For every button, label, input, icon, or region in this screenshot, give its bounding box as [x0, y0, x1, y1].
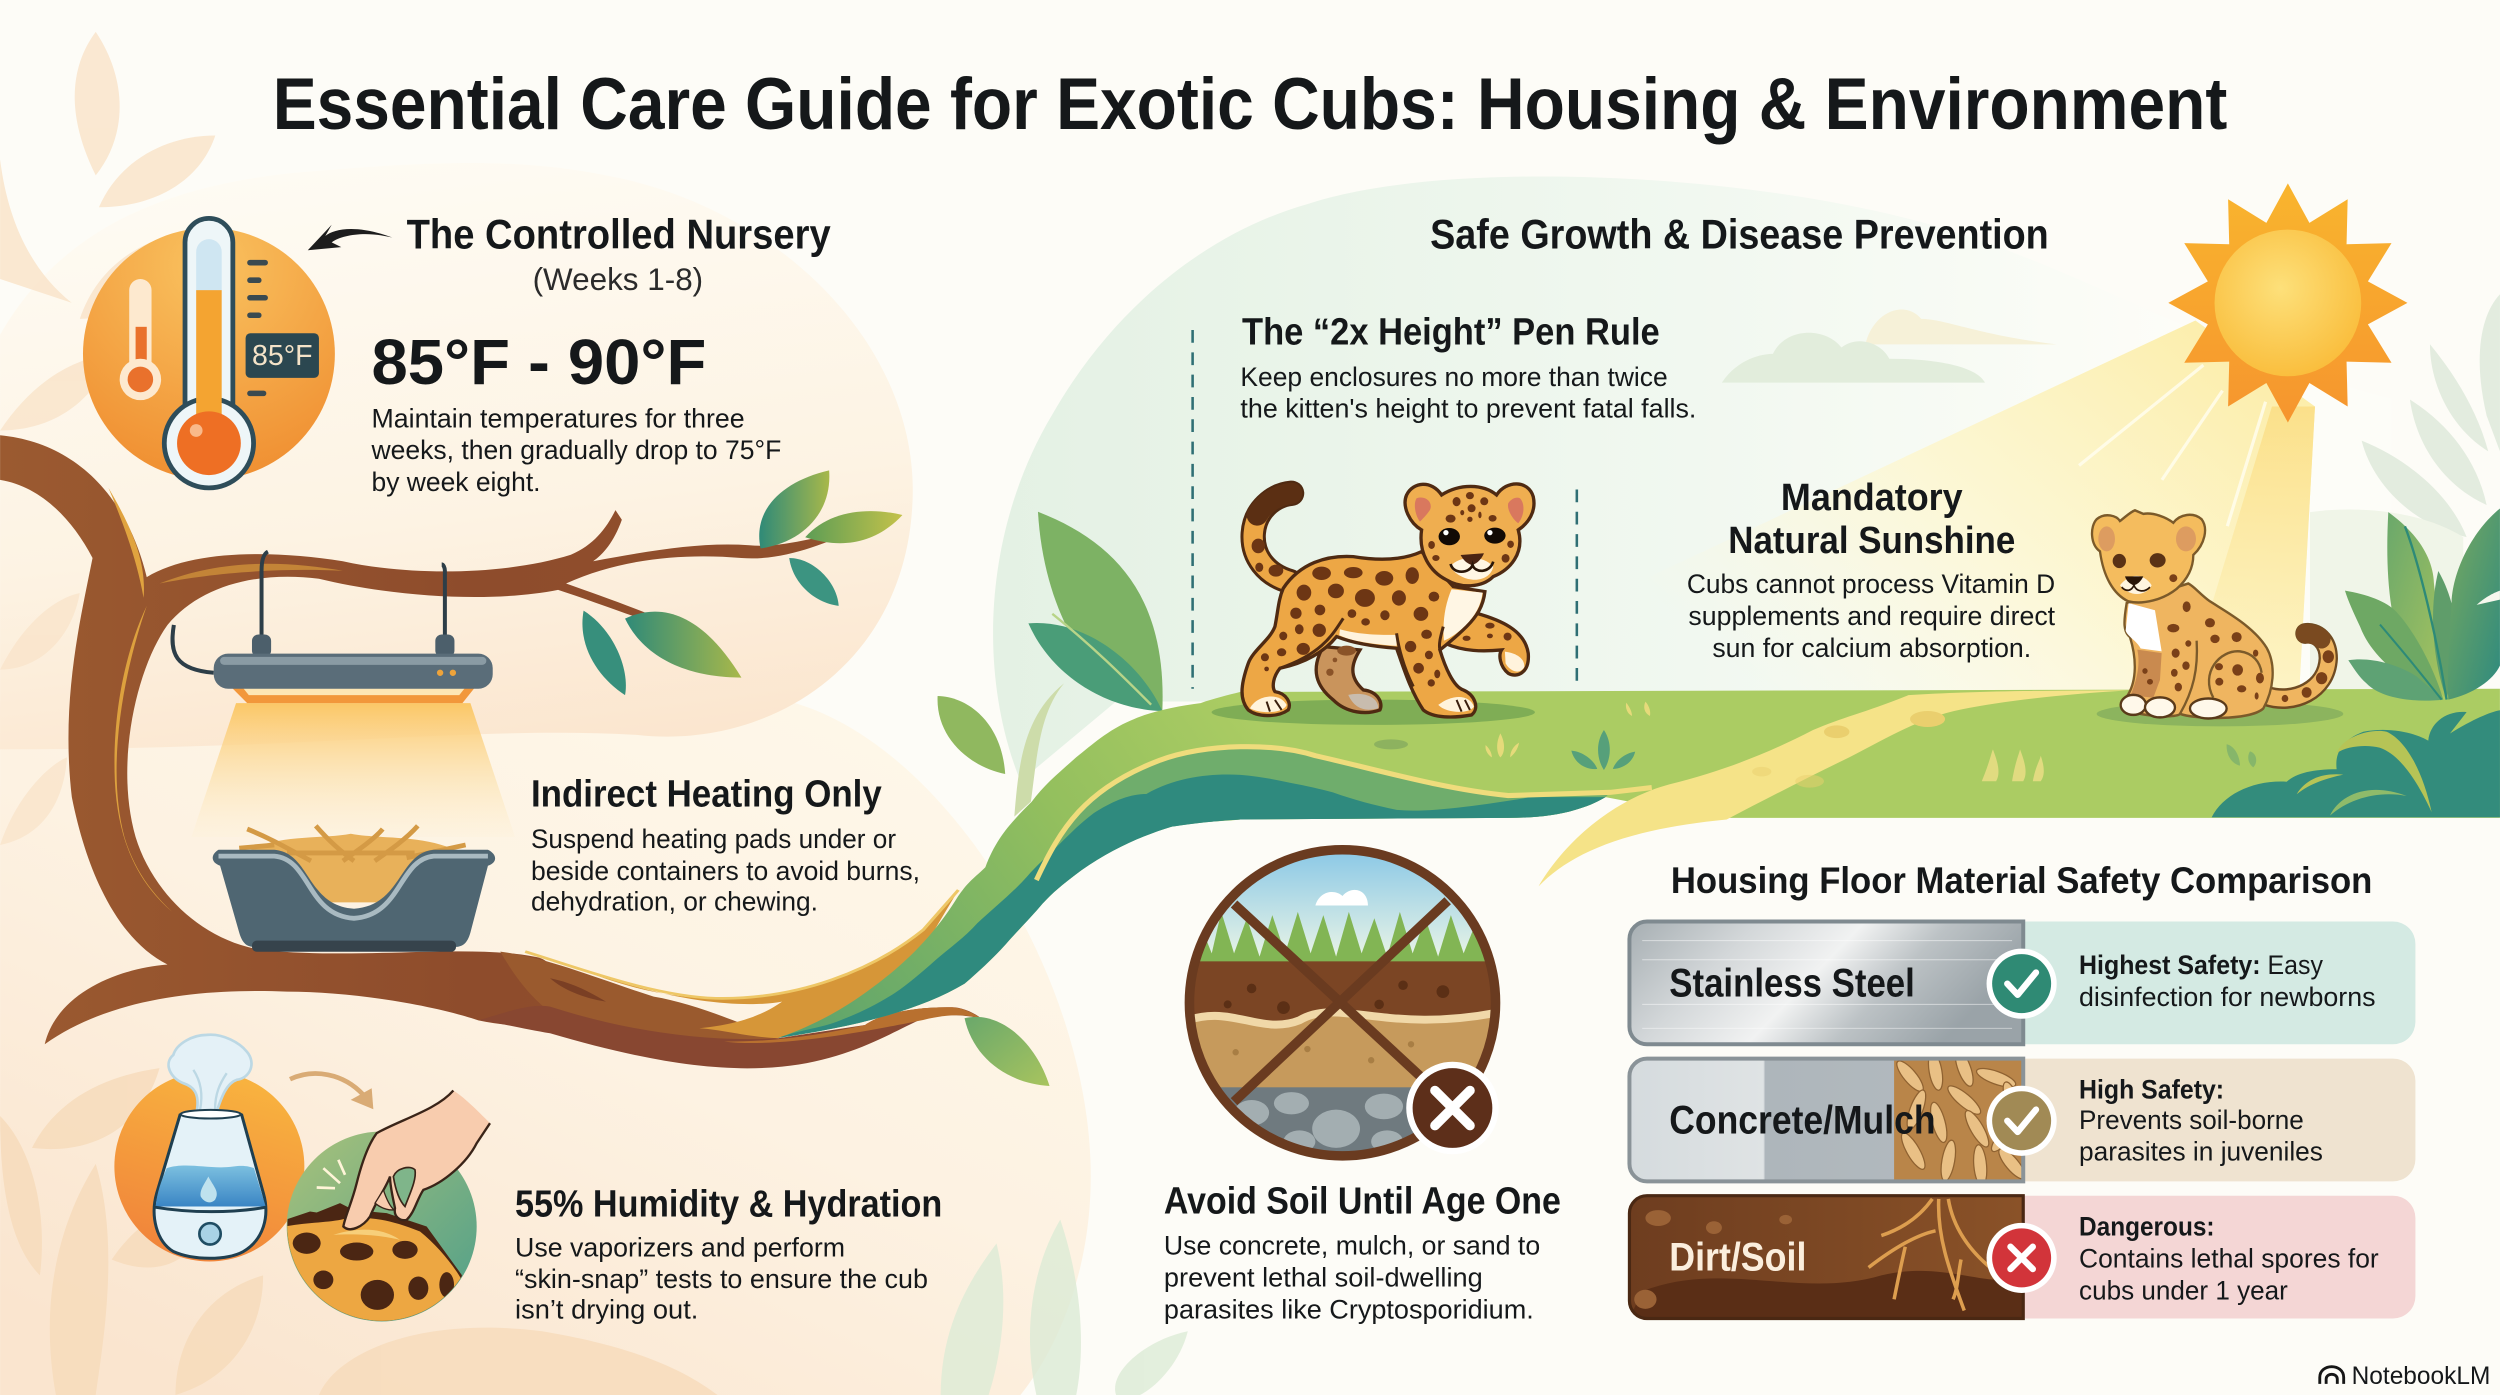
- heading: the controlled nursery: (Weeks 1-8): [533, 262, 703, 297]
- stat: temperature range: 85°F - 90°F: [372, 326, 706, 398]
- text: natural sunshine: Cubs cannot process Vitamin D: [1687, 568, 2055, 599]
- branch: lower limb and gold highlights: [480, 683, 1064, 1068]
- NotebookLM logo: NotebookLM: [2352, 1363, 2490, 1390]
- height markers: [1193, 330, 1577, 689]
- table row: stainless steel: [1629, 921, 2415, 1044]
- cub: walking cheetah: [1212, 484, 1535, 725]
- text: pen rule: the kitten's height to prevent fatal falls.: [1240, 393, 1696, 424]
- heading: safe growth: Safe Growth & Disease Prevention: [1430, 211, 2049, 258]
- text: indirect heating: [531, 773, 920, 916]
- text: avoid soil: Avoid Soil Until Age One: [1164, 1179, 1561, 1222]
- arrow to nursery heading: [308, 225, 392, 250]
- text: avoid soil: [1164, 1179, 1561, 1324]
- text: natural sunshine: supplements and require direct: [1688, 600, 2056, 631]
- text: natural sunshine: sun for calcium absorption.: [1712, 632, 2031, 663]
- table row: concrete and mulch: Prevents soil-borne: [2079, 1104, 2304, 1135]
- plants at lower right: [2212, 509, 2500, 817]
- icon: skin-snap test: [285, 1091, 490, 1327]
- plants flanking the hill: [1028, 512, 1163, 711]
- table row: dirt and soil: [1629, 1196, 2415, 1318]
- icon: heat lamp and nest basket: [172, 552, 515, 952]
- text: humidity and hydration: [515, 1182, 942, 1324]
- pale foliage at right: [2310, 294, 2500, 694]
- table row: dirt and soil: Dangerous:: [2079, 1211, 2215, 1242]
- cub: sitting cheetah: [2092, 510, 2343, 726]
- table row: concrete and mulch: Concrete/Mulch: [1669, 1099, 1936, 1143]
- text: natural sunshine: [1687, 476, 2056, 663]
- text: avoid soil: Use concrete, mulch, or sand to: [1164, 1230, 1540, 1261]
- title: Essential Care Guide for Exotic Cubs: Housing & Environment: [273, 63, 2227, 145]
- icon: thermometer: [83, 218, 335, 488]
- table row: dirt and soil: Contains lethal spores for: [2079, 1242, 2379, 1273]
- text: temperature guidance: Maintain temperatures for three: [372, 402, 745, 433]
- icon: humidifier: [114, 1035, 304, 1262]
- text: pen rule: Keep enclosures no more than twice: [1240, 361, 1668, 392]
- heading: the controlled nursery: The Controlled Nursery: [407, 211, 831, 258]
- text: humidity and hydration: “skin-snap” tests to ensure the cub: [515, 1263, 928, 1294]
- text: indirect heating: Suspend heating pads under or: [531, 823, 896, 854]
- text: indirect heating: Indirect Heating Only: [531, 773, 882, 816]
- icon: sun: [2168, 183, 2407, 422]
- table row: stainless steel: disinfection for newborns: [2079, 981, 2376, 1012]
- background cloud: [1722, 310, 2057, 383]
- text: avoid soil: prevent lethal soil-dwelling: [1164, 1262, 1483, 1293]
- arrow: humidifier to skin test: [290, 1074, 373, 1109]
- table row: concrete and mulch: parasites in juveniles: [2079, 1136, 2323, 1167]
- text: avoid soil: parasites like Cryptosporidium.: [1164, 1293, 1534, 1324]
- text: indirect heating: beside containers to avoid burns,: [531, 855, 920, 886]
- table row: stainless steel: Stainless Steel: [1669, 961, 1915, 1005]
- table row: stainless steel: Highest Safety: Easy: [2079, 949, 2323, 980]
- heading: floor comparison: Housing Floor Material Safety Comparison: [1671, 860, 2372, 901]
- table row: concrete and mulch: [1629, 1048, 2415, 1187]
- table row: dirt and soil: cubs under 1 year: [2079, 1274, 2288, 1305]
- sun rays: [1594, 320, 2315, 695]
- leaves on the branch: [582, 470, 1050, 1086]
- text: temperature guidance: weeks, then gradually drop to 75°F: [371, 434, 781, 465]
- text: natural sunshine: Natural Sunshine: [1728, 519, 2015, 562]
- branch: main tree: [0, 435, 861, 1044]
- text: natural sunshine: Mandatory: [1781, 476, 1963, 519]
- text: humidity and hydration: Use vaporizers and perform: [515, 1231, 845, 1262]
- illustration: crossed-out soil cross-section: [1180, 845, 1507, 1164]
- text: pen rule: The “2x Height” Pen Rule: [1242, 310, 1660, 353]
- text: humidity and hydration: isn’t drying out.: [515, 1293, 698, 1324]
- text: indirect heating: dehydration, or chewing.: [531, 885, 818, 916]
- icon: thermometer: 85°F: [252, 340, 313, 372]
- text: temperature guidance: [371, 402, 781, 497]
- landscape: hill, swoosh and path: [778, 689, 2500, 1038]
- text: humidity and hydration: 55% Humidity & Hydration: [515, 1182, 942, 1225]
- table row: concrete and mulch: High Safety:: [2079, 1073, 2224, 1104]
- text: temperature guidance: by week eight.: [372, 466, 541, 497]
- text: pen rule: [1240, 310, 1696, 424]
- heading: the controlled nursery: [407, 211, 831, 297]
- table row: dirt and soil: Dirt/Soil: [1669, 1236, 1806, 1280]
